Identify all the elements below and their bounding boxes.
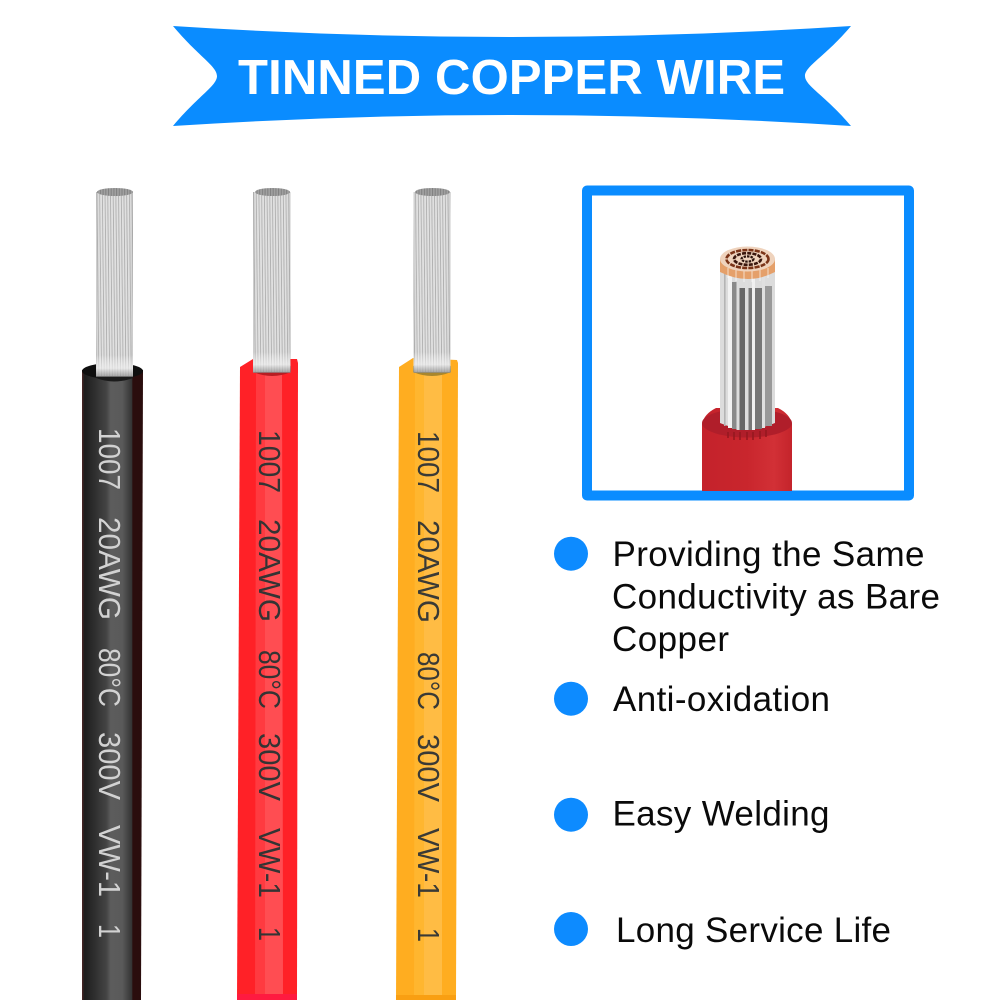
wire marking: [92, 428, 127, 938]
text: conductivity: Providing the Same: [612, 535, 924, 574]
text: service life: Long Service Life: [616, 911, 891, 950]
wire marking: [411, 431, 446, 942]
wire marking: [252, 430, 287, 941]
text: conductivity: Copper: [612, 620, 729, 659]
wire marking: 1007: [92, 428, 127, 490]
wire marking: 80°C: [252, 650, 287, 709]
bullet: conductivity: [554, 537, 588, 571]
bullet: easy welding: [554, 798, 588, 832]
text: conductivity: [612, 535, 940, 659]
panel: wire close-up: [587, 190, 909, 496]
red jacket: [702, 408, 792, 491]
wire marking: 1: [252, 927, 287, 941]
tinned strands: [720, 262, 775, 430]
wire marking: 1: [411, 928, 446, 942]
text: anti-oxidation: Anti-oxidation: [613, 680, 830, 719]
feature list: [554, 535, 940, 950]
wire marking: 20AWG: [411, 520, 446, 623]
wire marking: 1: [92, 924, 127, 938]
text: conductivity: Conductivity as Bare: [612, 578, 940, 616]
wire marking: 300V: [92, 732, 127, 800]
wire marking: 300V: [411, 734, 446, 802]
text: easy welding: Easy Welding: [612, 795, 830, 834]
title: TINNED COPPER WIRE: [238, 51, 785, 105]
wire marking: VW-1: [252, 828, 287, 898]
wire marking: 20AWG: [92, 517, 127, 620]
yellow wire: [396, 188, 458, 1000]
wire marking: 20AWG: [252, 519, 287, 622]
red wire: [237, 188, 298, 1000]
banner: [173, 26, 851, 126]
wire marking: 80°C: [92, 648, 127, 707]
bullet: service life: [554, 912, 588, 946]
wire marking: 80°C: [411, 652, 446, 710]
wire marking: VW-1: [92, 825, 127, 897]
copper strand ends: [720, 246, 775, 282]
black wire: [82, 188, 143, 1000]
bullet: anti-oxidation: [554, 682, 588, 716]
wire marking: VW-1: [411, 828, 446, 898]
wire marking: 300V: [252, 733, 287, 801]
wire marking: 1007: [252, 430, 287, 493]
wire marking: 1007: [411, 431, 446, 493]
